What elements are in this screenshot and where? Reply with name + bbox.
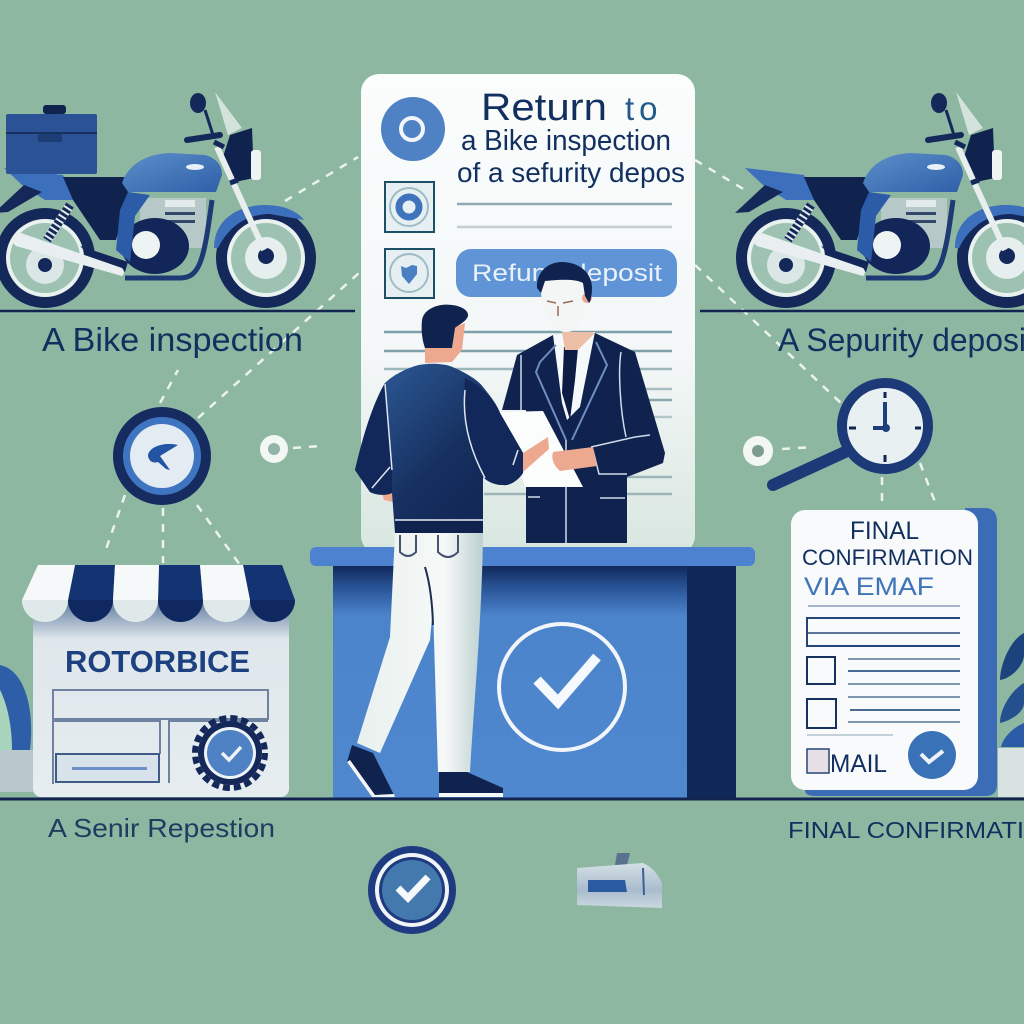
form fields bbox=[807, 606, 960, 735]
text lines bbox=[384, 204, 672, 494]
icon: back badge bbox=[113, 407, 211, 505]
email label: MAIL bbox=[830, 750, 887, 778]
hand: agent bbox=[552, 447, 597, 471]
heading: document title bbox=[457, 87, 685, 188]
heading: document title: Return bbox=[481, 87, 607, 129]
icon: right node bbox=[743, 436, 773, 466]
icon: seal bbox=[195, 718, 265, 788]
shop form bbox=[53, 690, 268, 784]
icon: checkbox two bbox=[385, 249, 434, 298]
label: senior reception: A Senir Repestion bbox=[48, 813, 275, 843]
shop name: ROTORBICE bbox=[65, 644, 250, 679]
panel: final confirmation bbox=[791, 508, 997, 796]
icon: email check bbox=[908, 731, 956, 779]
icon: big check bbox=[499, 624, 625, 750]
heading: document title: of a sefurity depos bbox=[457, 157, 685, 188]
label: bike inspection: A Bike inspection bbox=[42, 321, 303, 358]
form heading: FINAL bbox=[850, 517, 919, 545]
paper bbox=[500, 411, 583, 487]
icon: printer bbox=[577, 853, 662, 908]
label: security deposit: A Sepurity deposi bbox=[778, 322, 1024, 358]
dashed connectors bbox=[105, 157, 937, 565]
panel: return document bbox=[361, 74, 695, 554]
icon: checkbox one bbox=[385, 182, 434, 232]
motorcycle left bbox=[0, 92, 316, 308]
heading: document title: to bbox=[625, 90, 663, 127]
button: refund deposit bbox=[456, 249, 677, 297]
icon: left node bbox=[260, 435, 288, 463]
email label bbox=[807, 749, 887, 778]
form heading: VIA EMAF bbox=[804, 573, 934, 601]
baseline bbox=[0, 798, 1024, 800]
icon: document badge bbox=[381, 97, 445, 161]
figure: customer bbox=[347, 305, 549, 797]
shop awning bbox=[22, 565, 295, 622]
panel: shop bbox=[22, 565, 295, 797]
form heading: CONFIRMATION bbox=[802, 545, 973, 570]
plants bbox=[0, 633, 1024, 797]
label: final confirmation: FINAL CONFIRMATI bbox=[788, 817, 1024, 843]
form heading bbox=[802, 517, 973, 601]
heading: document title: a Bike inspection bbox=[461, 125, 671, 157]
motorcycle right bbox=[735, 92, 1024, 308]
button: refund deposit: Refund deposit bbox=[472, 260, 662, 287]
counter bbox=[310, 547, 755, 798]
icon: magnifier clock bbox=[773, 383, 928, 485]
figure: agent bbox=[502, 262, 665, 543]
shelf lines bbox=[0, 310, 1024, 312]
icon: bottom check badge bbox=[368, 846, 456, 934]
